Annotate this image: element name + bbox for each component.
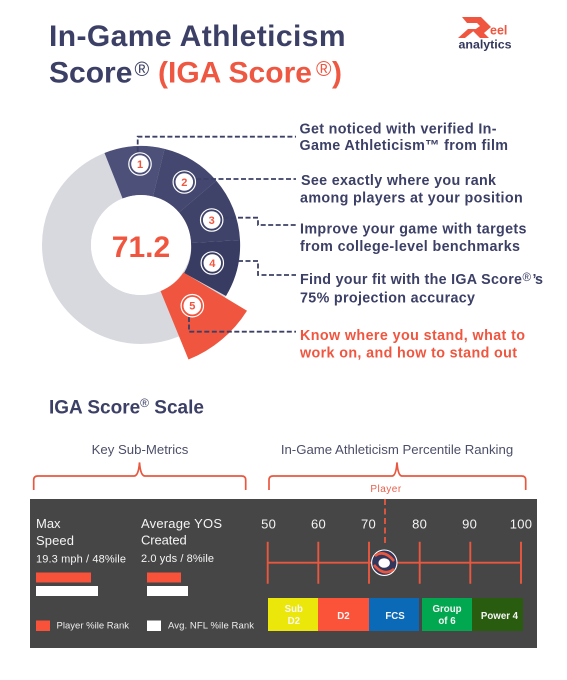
number badges [129,153,224,317]
band: D2: D2 [337,611,350,622]
title: In-Game Athleticism [49,20,346,53]
player dashed line [384,499,386,545]
benefit text 5 [299,328,525,362]
connector lines [138,137,296,332]
logo: Reel Analytics: eel [490,24,507,38]
scale axis numbers: 80 [412,516,427,531]
badge 5 [181,294,204,317]
scale heading: IGA Score [49,398,140,418]
scale axis numbers: 50 [261,516,276,531]
inner circle score [91,195,191,295]
benefit text 2: among players at your position [300,191,523,207]
scale axis numbers: 70 [361,516,376,531]
tier bands [268,598,523,631]
band: Group of 6: Group [432,604,462,615]
benefit text 5: work on, and how to stand out [299,346,517,362]
slice 1 [104,146,165,198]
benefit text 4 [300,272,543,306]
benefit text 5: Know where you stand, what to [300,328,525,344]
band: Group of 6 [422,598,472,631]
benefit text 2 [300,173,523,207]
metric: max speed [36,516,126,596]
band: FCS: FCS [385,611,405,622]
label: key sub-metrics: Key Sub-Metrics [92,442,189,457]
band: FCS [369,598,419,631]
slice 3 [179,181,240,243]
scale heading: Scale [149,398,204,418]
benefit text 3: from college-level benchmarks [300,239,520,255]
band: Sub D2 [268,598,318,631]
benefit text 4: ® [522,272,532,284]
benefit text 1 [300,121,508,154]
badge 3 [200,209,223,231]
scale axis numbers [261,516,532,531]
logo: Reel Analytics: analytics [458,38,512,52]
band: Group of 6: of 6 [438,616,456,627]
inner circle score: 71.2 [112,231,170,264]
logo: Reel Analytics [458,17,512,52]
title: (IGA Score [158,56,312,90]
label: player: Player [370,484,402,495]
scale axis numbers: 60 [311,516,326,531]
title: ) [332,56,342,90]
scale axis line [268,542,521,584]
bracket: percentile [269,462,526,490]
badge 2 [173,171,196,193]
metric: average YOS created: Created [141,532,187,547]
scale axis numbers: 90 [462,516,477,531]
benefit text 3: Improve your game with targets [300,221,527,237]
badge 3: 3 [209,215,215,227]
badge 1: 1 [137,159,143,171]
band: Sub D2: D2 [288,616,300,627]
metric: max speed: 19.3 mph / 48%ile [36,554,126,566]
benefit text 1: Get noticed with verified In- [300,121,497,137]
badge 1 [129,153,151,175]
title [49,20,346,90]
band: Sub D2: Sub [285,604,303,615]
scale axis numbers: 100 [510,516,532,531]
title: ® [134,59,150,81]
legend: NFL rank: Avg. NFL %ile Rank [168,620,254,632]
metric: average YOS created: Average YOS [141,516,222,531]
benefit text 2: See exactly where you rank [301,173,496,189]
dark panel [30,499,537,648]
band: Power 4 [472,598,523,631]
bracket: sub-metrics [34,462,246,490]
legend: player rank: Player %ile Rank [56,620,129,632]
badge 5: 5 [189,301,195,313]
badge 4: 4 [209,258,216,270]
title: ® [316,58,332,81]
badge 4 [201,252,224,274]
benefit text 1: Game Athleticism™ from film [300,138,508,154]
metric: average YOS created [141,516,222,596]
band: D2 [318,598,369,631]
label: percentile ranking: In-Game Athleticism Percentile Ranking [281,442,513,457]
metric: average YOS created: 2.0 yds / 8%ile [141,553,214,565]
benefit text 4: ’s [532,272,543,288]
benefit text 3 [300,221,527,255]
benefit text 4: Find your fit with the IGA Score [300,272,522,288]
badge 2: 2 [181,177,187,189]
band: Power 4: Power 4 [481,611,519,622]
benefit text 4: 75% projection accuracy [300,290,475,306]
title: Score [49,56,132,90]
slice 2 [153,149,216,212]
metric: max speed: Max [36,516,61,531]
slice 4 [184,240,240,296]
scale heading: ® [140,396,149,410]
donut chart [66,146,247,360]
donut: grey remainder [66,170,216,320]
player marker [372,550,397,575]
slice 5: highlighted [160,272,247,360]
metric: max speed: Speed [36,533,74,548]
